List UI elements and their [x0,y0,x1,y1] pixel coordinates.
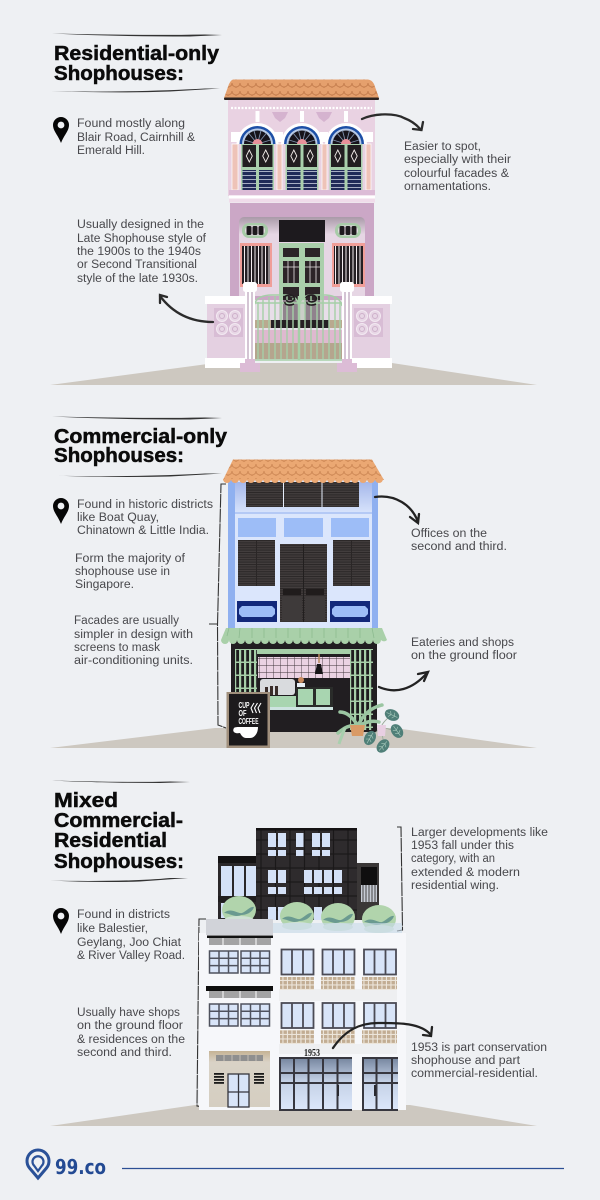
section: residential-only shophouses [50,34,537,385]
illustration: blue commercial shophouse [221,460,387,732]
text: location: like Boat Quay, [77,512,159,524]
ground [50,363,537,385]
text: easier to spot: ornamentations. [404,181,491,193]
text: location: Found in historic districts [77,499,213,511]
awning [221,628,387,644]
text: location: Found in districts [77,909,170,921]
text: location: Geylang, Joo Chiat [77,937,182,949]
illustration: 1953 mixed development [199,828,406,1110]
text: larger developments: residential wing. [411,880,499,892]
section: commercial-only shophouses [50,416,537,755]
text: usage: Usually have shops [77,1007,180,1019]
text: 1953 conservation: 1953 is part conservation [411,1042,547,1054]
text: easier to spot: Easier to spot, [404,141,481,153]
sign: cup of coffee: OF [238,709,247,718]
text: usage: & residences on the [77,1034,185,1046]
text: facades: air-conditioning units. [74,655,193,667]
sign: cup of coffee: COFFEE [238,717,259,726]
footer [27,1150,564,1179]
text: facades: Facades are usually [74,615,179,627]
upper storey [228,98,375,202]
gate [254,295,342,360]
bracket: facade [209,484,226,728]
arrow: to eateries [379,672,428,690]
text: style: or Second Transitional [77,259,197,271]
sign: cup of coffee [226,692,270,748]
heading rules [52,416,222,477]
text: facades: screens to mask [74,642,160,654]
text: style: style of the late 1930s. [77,273,198,285]
text: larger developments: category, with an [411,853,495,865]
upper storeys [228,480,378,628]
icon: logo pin [27,1150,49,1178]
text: facades: simpler in design with [74,629,193,641]
bracket: residential wing [397,827,402,931]
section: mixed commercial-residential shophouses [50,780,548,1126]
text: style: Late Shophouse style of [77,233,207,245]
bracket: conservation shophouse [197,919,210,1108]
ground [50,1105,537,1126]
text: style: the 1900s to the 1940s [77,246,201,258]
text: offices: Offices on the [411,528,487,540]
text: larger developments: 1953 fall under this [411,840,514,852]
heading: residential-only shophouses: Residential-only [54,43,220,65]
text: majority: Singapore. [75,579,134,591]
text: eateries: Eateries and shops [411,637,514,649]
modern residential wing [218,828,379,920]
rooftop bushes [222,896,396,933]
text: style: Usually designed in the [77,219,204,231]
ground [50,728,537,748]
ground floor cafe [231,640,377,732]
text: larger developments: extended & modern [411,867,520,879]
text: easier to spot: colourful facades & [404,168,509,180]
lower storey [230,203,374,323]
heading: mixed commercial-residential shophouses: Shophouses: [54,851,184,873]
icon: location pin [53,498,69,524]
conservation shophouse frontage [206,936,273,1107]
heading rules [50,780,190,882]
text: usage: on the ground floor [77,1020,183,1032]
text: location: like Balestier, [77,923,148,935]
text: offices: second and third. [411,541,507,553]
text: eateries: on the ground floor [411,650,517,662]
wordmark: 99.co [55,1155,106,1179]
text: usage: second and third. [77,1047,172,1059]
arrow: to boundary wall [160,295,213,322]
text: 1953 conservation: shophouse and part [411,1055,521,1067]
heading rules [51,34,222,92]
boundary wall [205,296,392,368]
heading: commercial-only shophouses: Shophouses: [54,445,184,467]
roof [224,80,379,100]
columns [240,282,357,372]
text: location: Blair Road, Cairnhill & [77,132,195,144]
text: majority: Form the majority of [75,553,186,565]
icon: location pin [53,117,69,143]
heading: mixed commercial-residential shophouses: Mixed [54,790,118,812]
1953 facade [279,950,397,1054]
text: location: Chinatown & Little India. [77,525,209,537]
text: larger developments: Larger developments like [411,827,548,839]
logo: 99.co [27,1150,106,1179]
roof [223,460,384,483]
plants [338,705,406,755]
text: location: Emerald Hill. [77,145,145,157]
heading: mixed commercial-residential shophouses: Residential [54,830,167,852]
shopfronts [279,1058,398,1110]
arrow: to facade [362,114,423,130]
arrow: from 1953 sign [333,1023,432,1048]
text: location: & River Valley Road. [77,950,185,962]
text: majority: shophouse use in [75,566,170,578]
illustration: pink residential shophouse [205,80,392,372]
heading: commercial-only shophouses: Commercial-only [54,426,228,448]
1953 sign: 1953 [304,1048,320,1059]
main block [199,919,406,1110]
sign: cup of coffee: CUP [238,701,250,710]
text: location: Found mostly along [77,118,185,130]
icon: location pin [53,908,69,934]
arrow: to offices [375,497,419,523]
text: 1953 conservation: commercial-residential. [411,1068,538,1080]
heading: mixed commercial-residential shophouses: Commercial- [54,810,183,832]
text: easier to spot: especially with their [404,154,511,166]
heading: residential-only shophouses: Shophouses: [54,63,184,85]
